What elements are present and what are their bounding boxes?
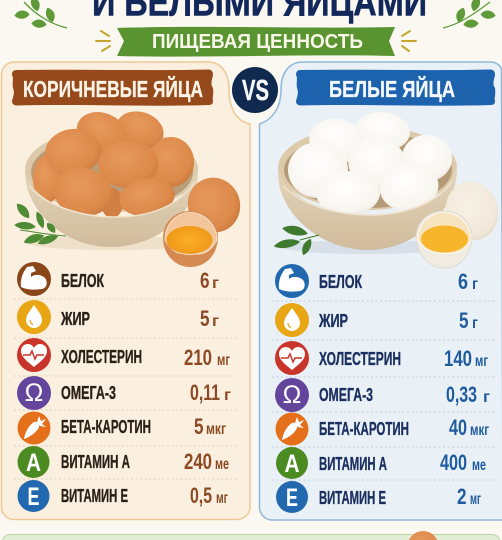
- icon: left leaf branch: [14, 0, 67, 28]
- row: fat: [17, 300, 220, 334]
- row: vitamin E: ВИТАМИН Е: [319, 488, 386, 508]
- banner: white eggs: [296, 70, 495, 106]
- row: fat: ЖИР: [318, 311, 348, 331]
- row: beta-carotene: 40: [449, 415, 467, 440]
- row: vitamin E: мг: [470, 491, 481, 508]
- illustration: whole white egg: [439, 176, 502, 246]
- illustration: cracked egg with yolk: [163, 211, 218, 267]
- icon: right leaf branch: [443, 0, 496, 28]
- illustration: bowl of white eggs: [278, 108, 457, 254]
- row: beta-carotene: [276, 412, 489, 446]
- VS badge: [231, 66, 279, 114]
- row: beta-carotene: мкг: [206, 421, 226, 438]
- illustration: whole brown egg: [180, 170, 248, 240]
- row: vitamin E: [18, 480, 228, 512]
- row: vitamin E: Е: [28, 483, 40, 511]
- table: brown egg nutrients: [14, 262, 237, 512]
- subtitle ribbon: ПИЩЕВАЯ ЦЕННОСТЬ: [152, 31, 363, 53]
- row: protein: БЕЛОК: [319, 272, 363, 292]
- row: fat: г: [212, 313, 220, 330]
- row: omega-3: г: [483, 389, 491, 406]
- row: protein: 6: [458, 269, 468, 294]
- row: cholesterol: 210: [184, 345, 212, 370]
- row: omega-3: 0,33: [446, 382, 477, 407]
- row: beta-carotene: 5: [194, 414, 204, 439]
- panel: brown eggs: [2, 62, 250, 520]
- row: vitamin E: ВИТАМИН Е: [61, 486, 128, 506]
- panel: white eggs: [260, 62, 502, 520]
- row: cholesterol: ХОЛЕСТЕРИН: [319, 349, 401, 369]
- row: vitamin E: мг: [216, 490, 228, 507]
- row: beta-carotene: БЕТА-КАРОТИН: [319, 419, 409, 439]
- VS badge: VS: [242, 75, 269, 107]
- row: vitamin A: 240: [184, 449, 212, 474]
- row: vitamin E: Е: [286, 484, 298, 512]
- row: protein: г: [212, 275, 220, 292]
- row: vitamin A: [276, 447, 486, 479]
- row: cholesterol: [275, 341, 488, 375]
- row: vitamin E: 0,5: [190, 483, 212, 508]
- row: vitamin E: [276, 481, 481, 513]
- row: protein: БЕЛОК: [61, 271, 105, 291]
- row: vitamin A: А: [284, 450, 300, 478]
- row: omega-3: Ω: [283, 381, 301, 409]
- panel: bottom summary strip: [2, 531, 500, 540]
- row: omega-3: [275, 378, 491, 412]
- row: protein: [275, 264, 478, 298]
- row: cholesterol: 140: [444, 346, 472, 371]
- banner: brown eggs: [12, 70, 213, 106]
- row: vitamin E: 2: [457, 484, 466, 509]
- row: fat: [275, 303, 478, 337]
- row: vitamin A: ме: [472, 457, 486, 474]
- subtitle ribbon: [117, 27, 395, 57]
- row: cholesterol: ХОЛЕСТЕРИН: [61, 347, 142, 367]
- icon: right sparks: [402, 31, 416, 51]
- row: fat: 5: [200, 306, 210, 331]
- banner: white eggs: БЕЛЫЕ ЯЙЦА: [329, 75, 455, 102]
- row: omega-3: ОМЕГА-3: [61, 383, 116, 403]
- row: beta-carotene: [18, 412, 226, 444]
- row: fat: ЖИР: [60, 309, 90, 329]
- row: protein: г: [472, 276, 478, 293]
- row: omega-3: ОМЕГА-3: [319, 385, 373, 405]
- row: vitamin A: ВИТАМИН А: [319, 454, 387, 474]
- row: omega-3: Ω: [25, 379, 43, 407]
- row: protein: 6: [200, 268, 210, 293]
- illustration: green leaves: [14, 201, 66, 247]
- row: beta-carotene: мкг: [470, 422, 489, 439]
- icon: egg peeking in bottom strip: [407, 531, 439, 540]
- row: vitamin A: ме: [215, 456, 229, 473]
- illustration: bowl of brown eggs: [25, 105, 198, 250]
- table: white egg nutrients: [272, 264, 495, 513]
- row: vitamin A: [18, 446, 229, 478]
- row: fat: г: [472, 315, 478, 332]
- illustration: green leaves: [273, 223, 319, 257]
- row: omega-3: [17, 376, 232, 410]
- row: cholesterol: мг: [217, 352, 230, 369]
- row: protein: [17, 262, 220, 296]
- banner: brown eggs: КОРИЧНЕВЫЕ ЯЙЦА: [23, 75, 203, 102]
- illustration: cracked white egg with yolk: [416, 211, 472, 268]
- row: cholesterol: [17, 338, 230, 372]
- row: omega-3: г: [224, 387, 232, 404]
- row: vitamin A: ВИТАМИН А: [61, 452, 130, 472]
- row: beta-carotene: БЕТА-КАРОТИН: [61, 417, 151, 437]
- row: fat: 5: [459, 308, 468, 333]
- row: vitamin A: А: [26, 449, 41, 477]
- row: omega-3: 0,11: [190, 380, 220, 405]
- icon: left sparks: [96, 31, 110, 51]
- row: vitamin A: 400: [440, 450, 467, 475]
- row: cholesterol: мг: [475, 353, 488, 370]
